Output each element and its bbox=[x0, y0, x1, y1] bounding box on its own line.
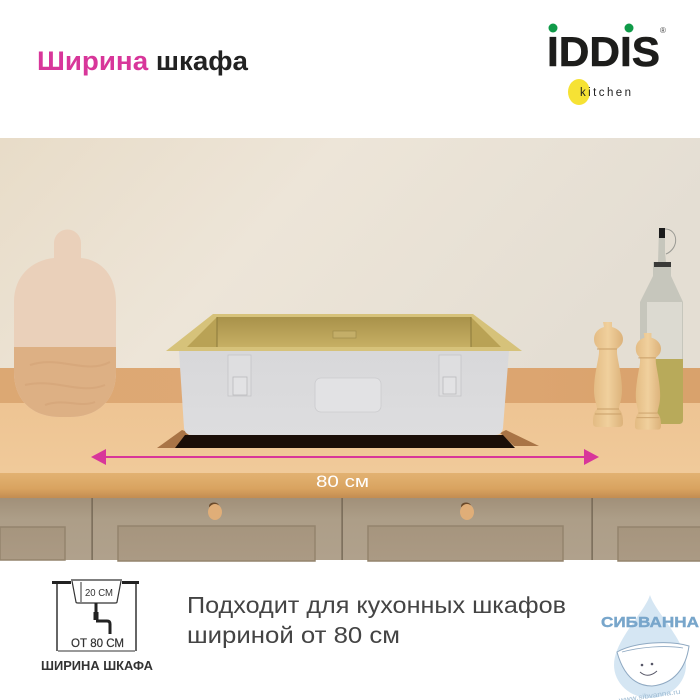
kitchen scene photo bbox=[0, 138, 700, 561]
description text: шириной от 80 см bbox=[187, 622, 400, 648]
logo: IDDIS kitchen: kitchen bbox=[580, 87, 631, 99]
pepper mill left bbox=[593, 322, 623, 427]
countertop front edge bbox=[0, 473, 700, 499]
sink cutout bbox=[157, 430, 539, 448]
sink steel body bbox=[179, 351, 509, 435]
width arrow bbox=[91, 449, 599, 465]
description text: Подходит для кухонных шкафов bbox=[187, 592, 566, 618]
icon caption: ШИРИНА ШКАФА bbox=[41, 658, 154, 673]
sink gold rim and interior bbox=[166, 314, 522, 351]
cutting board bbox=[14, 230, 116, 417]
centre label plate bbox=[315, 378, 381, 412]
knob right bbox=[460, 502, 474, 520]
left clip bbox=[228, 355, 251, 396]
logo: IDDIS kitchen bbox=[547, 24, 666, 105]
cabinet width icon: 20 СМ bbox=[85, 588, 113, 599]
description text bbox=[187, 592, 566, 648]
cabinet width icon bbox=[52, 580, 139, 651]
pepper mill right bbox=[635, 333, 661, 430]
sink bbox=[166, 314, 522, 435]
logo: IDDIS kitchen: ® bbox=[660, 26, 666, 35]
right clip bbox=[439, 355, 461, 396]
width label: 80 см bbox=[316, 472, 369, 491]
countertop surface bbox=[0, 403, 700, 473]
bottle bbox=[640, 228, 683, 424]
logo: IDDIS kitchen: IDDIS bbox=[547, 28, 660, 75]
wood backsplash band bbox=[0, 368, 700, 404]
cabinet doors bbox=[0, 498, 700, 561]
watermark: Sibvanna: СИБВАННА bbox=[601, 614, 699, 631]
knob left bbox=[208, 502, 222, 520]
watermark: Sibvanna bbox=[601, 595, 699, 700]
wall bbox=[0, 138, 700, 369]
cabinet width icon: ОТ 80 СМ bbox=[71, 636, 124, 650]
title: Ширина шкафа bbox=[37, 46, 249, 76]
